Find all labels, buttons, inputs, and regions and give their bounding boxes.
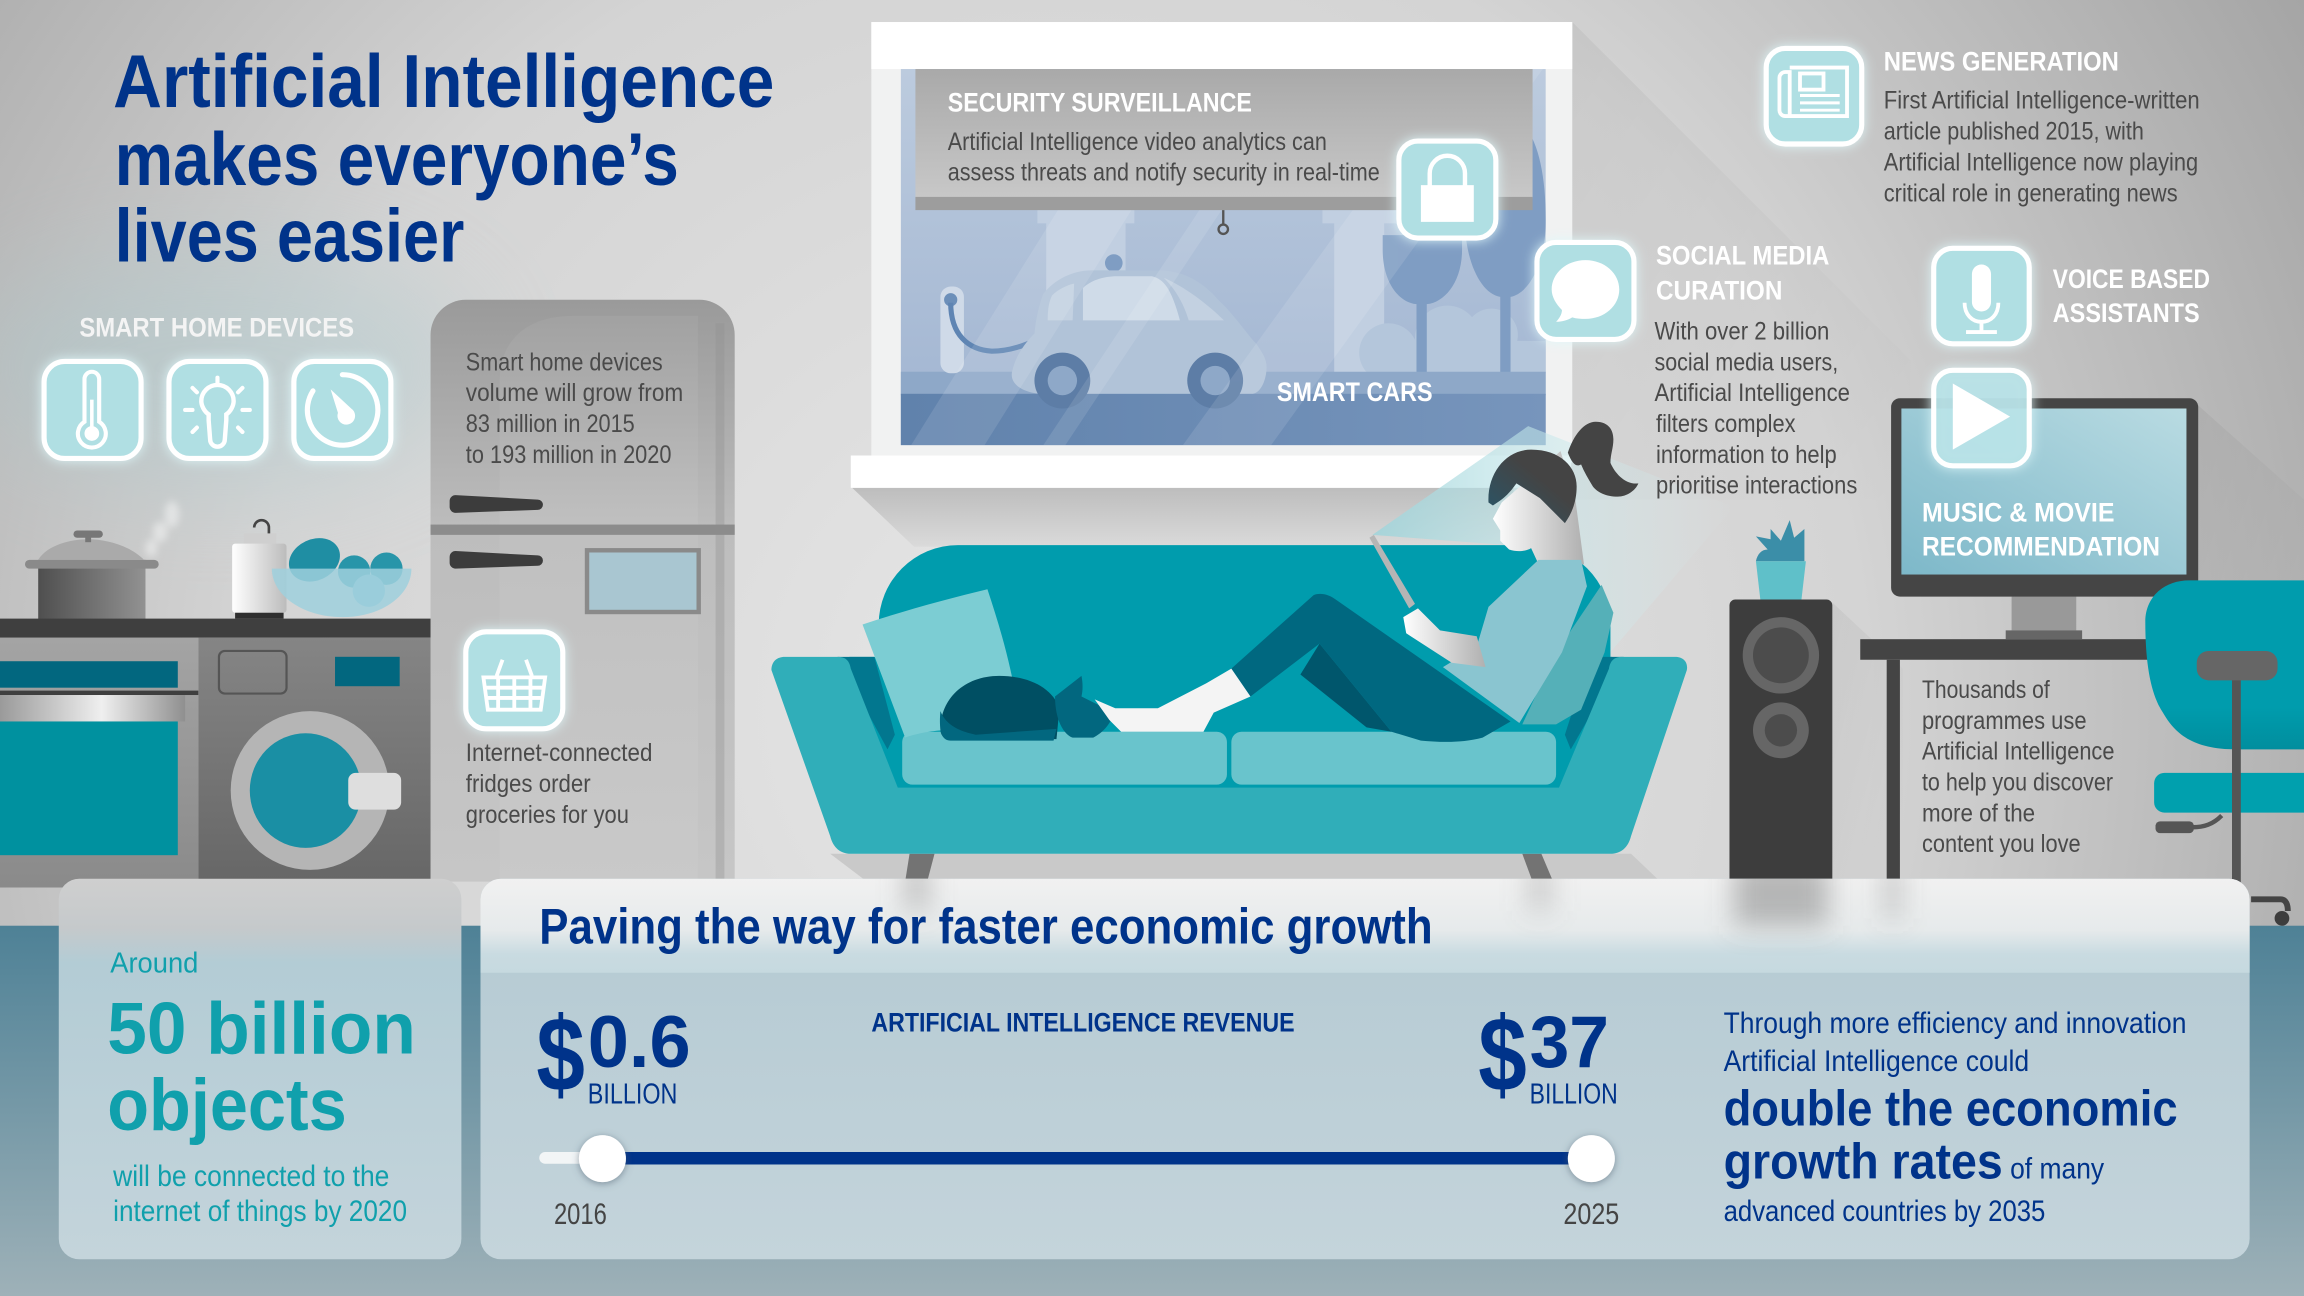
heading: social media curation [1656, 239, 1829, 306]
heading: social media curation: SOCIAL MEDIA [1656, 239, 1829, 270]
fridge [431, 300, 735, 882]
title: lives easier [115, 194, 464, 278]
heading: news generation: NEWS GENERATION [1884, 46, 2119, 77]
year labels: 2025 [1563, 1198, 1619, 1231]
text block: smart home volume: to 193 million in 2020 [466, 441, 672, 469]
value: $37 billion [1478, 995, 1618, 1113]
pillow [863, 589, 1020, 738]
text block: news generation: Artificial Intelligence now playing [1884, 148, 2198, 176]
kitchen [0, 501, 431, 888]
icon: microphone [1934, 248, 2029, 344]
window shadow [1572, 22, 1910, 500]
text block: music and movie: Thousands of [1922, 676, 2050, 704]
light beam from tablet [1372, 426, 1734, 654]
text block: social media curation: information to help [1656, 441, 1837, 469]
text block: music and movie [1922, 676, 2114, 858]
panel header band [480, 879, 2250, 973]
text block: security surveillance: Artificial Intelligence video analytics can [948, 128, 1327, 156]
value: $37 billion: $ [1478, 995, 1527, 1113]
text block: music and movie: Artificial Intelligence [1922, 738, 2114, 766]
window [851, 22, 1572, 488]
blurred reflections of room [905, 860, 1901, 926]
monitor shadow [2197, 404, 2304, 705]
trees [1383, 118, 1546, 373]
value: $37 billion: 37 [1530, 1000, 1609, 1083]
text block: social media curation: With over 2 billion [1655, 317, 1829, 345]
tablet [1369, 535, 1415, 608]
title [113, 39, 774, 278]
fruit bowl [272, 530, 411, 617]
text block: economic growth: growth rates [1724, 1133, 2003, 1189]
year labels: 2016 [554, 1198, 607, 1231]
icon: newspaper [1766, 48, 1862, 144]
speaker [1729, 600, 1832, 888]
stat: 50 billion objects [107, 987, 416, 1146]
text block: fridges order groceries [466, 739, 652, 829]
washing machine [198, 638, 431, 888]
title: Artificial Intelligence [113, 39, 774, 123]
panel: connected objects [59, 879, 461, 1259]
fridge screen [587, 550, 699, 612]
stat caption: will be connected to the [112, 1160, 389, 1193]
text block: fridges order groceries: fridges order [466, 770, 591, 798]
text block: fridges order groceries: groceries for you [466, 801, 629, 829]
year labels [554, 1198, 1619, 1231]
heading: voice based assistants: VOICE BASED [2053, 263, 2210, 294]
icon: shopping basket [466, 632, 563, 729]
icon: light bulb [169, 361, 266, 458]
speaker shadow [1832, 602, 1903, 882]
plant [1756, 520, 1806, 600]
back cushion [1522, 585, 1613, 724]
sill shadow [852, 488, 1513, 547]
desk [1860, 639, 2154, 888]
icon: speech bubble [1537, 242, 1634, 339]
cat [940, 676, 1114, 741]
arm and hand [1403, 608, 1486, 667]
label: smart cars: SMART CARS [1277, 376, 1433, 407]
far leg [1300, 644, 1392, 732]
window view: street [901, 69, 1546, 445]
text block: social media curation: Artificial Intelligence [1655, 379, 1850, 407]
stat caption: internet of things by 2020 [113, 1195, 407, 1228]
value: $0.6 billion [536, 995, 691, 1113]
text block: music and movie: content you love [1922, 830, 2081, 858]
stat caption [112, 1160, 407, 1228]
heading: music and movie recommendation [1922, 497, 2160, 561]
text block: smart home volume: volume will grow from [466, 379, 683, 407]
fridge handles [450, 495, 543, 569]
text block: security surveillance: assess threats and notify security in real-time [948, 159, 1380, 187]
smart car [1012, 254, 1267, 408]
text block: news generation: critical role in generating news [1884, 179, 2178, 207]
value: $0.6 billion: 0.6 [588, 1000, 691, 1083]
revenue timeline slider [539, 1135, 1615, 1182]
text block: fridges order groceries: Internet-connected [466, 739, 652, 767]
buildings [1037, 210, 1396, 375]
icon: play button [1934, 370, 2029, 466]
teal glow on wall [0, 250, 470, 485]
heading: voice based assistants [2053, 263, 2210, 328]
sofa backrest [879, 545, 1610, 735]
sofa base and arms [771, 657, 1687, 854]
stat: 50 billion objects: 50 billion [107, 987, 416, 1070]
fridge body [431, 300, 735, 882]
text block: economic growth: double the economic [1724, 1081, 2178, 1137]
chart title: ARTIFICIAL INTELLIGENCE REVENUE [871, 1007, 1295, 1038]
value: $0.6 billion: BILLION [588, 1079, 677, 1111]
text block: music and movie: to help you discover [1922, 769, 2113, 797]
bushes [1359, 306, 1546, 372]
stat: 50 billion objects: objects [107, 1063, 347, 1146]
text block: economic growth [1724, 1007, 2186, 1228]
text block: security surveillance [948, 128, 1380, 187]
socks and feet [1095, 669, 1250, 732]
monitor [1891, 398, 2198, 639]
ponytail [1568, 422, 1638, 497]
panel heading: Paving the way for faster economic growth [539, 898, 1433, 954]
heading: music and movie recommendation: RECOMMENDATION [1922, 530, 2160, 561]
face and neck [1493, 451, 1584, 567]
icon: thermometer [44, 361, 141, 458]
text block: economic growth: of many [2010, 1152, 2104, 1185]
text block: music and movie: more of the [1922, 799, 2035, 827]
floor [0, 926, 2304, 1296]
room wall [0, 0, 2304, 929]
heading: voice based assistants: ASSISTANTS [2053, 297, 2200, 328]
panel: economic growth [480, 860, 2250, 1259]
around: Around [110, 948, 198, 980]
text block: economic growth: Through more efficiency and innovation [1724, 1007, 2186, 1040]
text block: news generation: article published 2015, with [1884, 118, 2144, 146]
text block: social media curation [1655, 317, 1857, 500]
woman reading tablet [1095, 422, 1638, 742]
text block: smart home volume: 83 million in 2015 [466, 410, 635, 438]
heading: music and movie recommendation: MUSIC & MOVIE [1922, 497, 2114, 528]
window sill [851, 456, 1571, 488]
sofa legs [905, 854, 1553, 882]
text block: economic growth: advanced countries by 2035 [1724, 1195, 2045, 1228]
light reflections [912, 231, 1418, 445]
text block: social media curation: prioritise interactions [1656, 472, 1857, 500]
cooking pot with steam [25, 501, 179, 620]
text block: news generation [1884, 87, 2200, 207]
fridge door divider [431, 525, 735, 535]
oven [0, 638, 198, 888]
office chair [2145, 580, 2304, 926]
road [901, 394, 1546, 445]
sofa seat cushions [902, 732, 1556, 785]
value: $0.6 billion: $ [536, 995, 585, 1113]
blind cord [1219, 210, 1228, 234]
sofa floor shadow [830, 854, 1660, 882]
heading: social media curation: CURATION [1656, 275, 1782, 306]
text block: social media curation: social media users, [1655, 348, 1838, 376]
text block: news generation: First Artificial Intelligence-written [1884, 87, 2200, 115]
icon: padlock [1399, 141, 1496, 238]
countertop [0, 619, 431, 638]
title: makes everyone’s [115, 117, 679, 201]
text block: smart home volume [466, 348, 683, 469]
icon: timer dial [294, 361, 391, 458]
pavement [901, 372, 1546, 395]
text block: music and movie: programmes use [1922, 707, 2087, 735]
text block: social media curation: filters complex [1656, 410, 1796, 438]
paper towel roll [232, 520, 287, 619]
hair [1488, 450, 1577, 523]
sofa [771, 545, 1687, 882]
heading: smart home devices: SMART HOME DEVICES [79, 311, 354, 342]
pants [1231, 594, 1511, 742]
sofa seat well [849, 657, 1612, 793]
window blind [915, 69, 1533, 210]
value: $37 billion: BILLION [1530, 1079, 1618, 1111]
shirt [1443, 560, 1587, 723]
text block: smart home volume: Smart home devices [466, 348, 663, 376]
charging post [940, 286, 1028, 374]
heading: security surveillance: SECURITY SURVEILLANCE [948, 87, 1252, 118]
window frame [871, 22, 1572, 463]
text block: economic growth: Artificial Intelligence could [1724, 1045, 2029, 1078]
